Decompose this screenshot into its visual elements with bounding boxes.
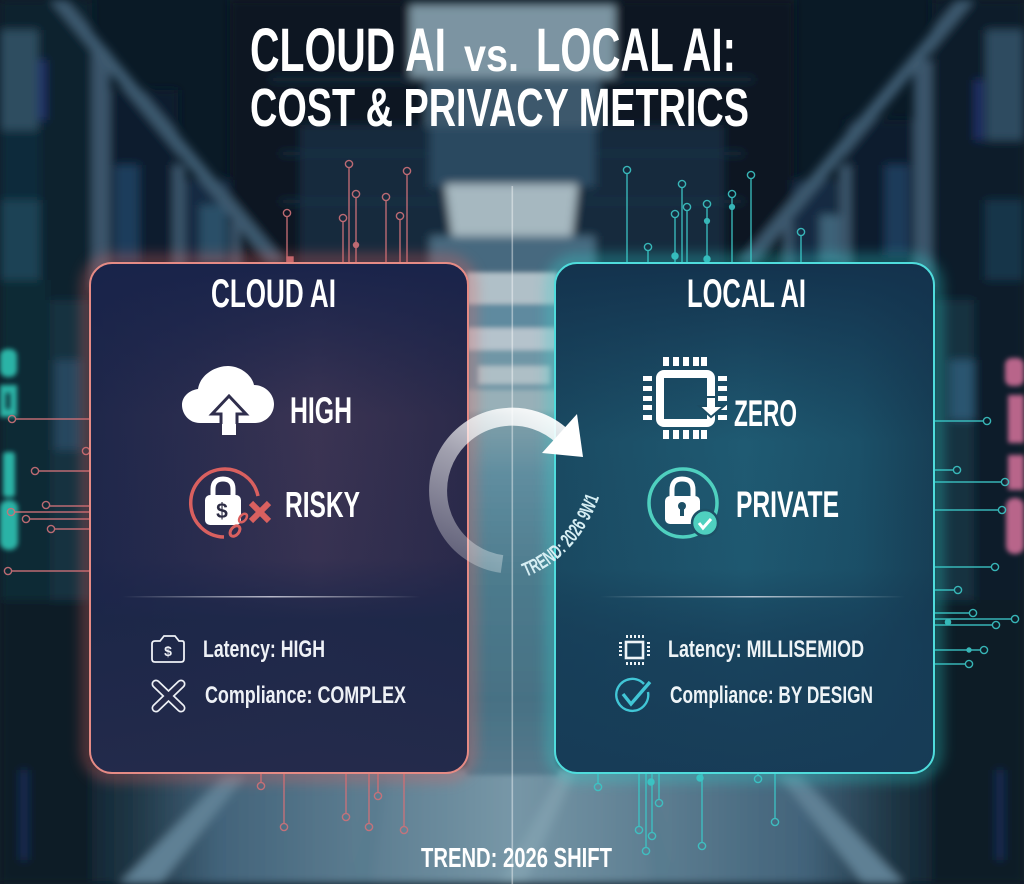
title: vs. <box>464 29 519 81</box>
icon: risky lock: $ <box>216 500 228 523</box>
panel: local AI <box>553 261 936 775</box>
icon: small chip <box>619 635 650 665</box>
icon: dollar case <box>152 636 184 662</box>
row: latency millisemiod: Latency: MILLISEMIOD <box>668 636 864 663</box>
icon: risky lock <box>191 469 269 538</box>
metric: cost high: HIGH <box>290 390 352 431</box>
icon: cloud upload <box>182 366 274 435</box>
icon: private lock <box>649 469 718 537</box>
right rack side <box>932 0 1024 884</box>
title: LOCAL AI: <box>536 16 736 84</box>
neon glow right <box>1005 358 1024 554</box>
icon: check circle <box>616 679 650 711</box>
lit floor and lower bands <box>80 765 944 884</box>
metric: privacy private: PRIVATE <box>736 484 839 525</box>
row: latency high: Latency: HIGH <box>203 636 325 663</box>
circuit traces: cloud side <box>4 160 411 834</box>
divider <box>122 596 420 598</box>
circuit traces: local side <box>594 166 1019 855</box>
heading: cloud AI: CLOUD AI <box>211 272 336 316</box>
title: CLOUD AI <box>250 16 446 84</box>
row: compliance complex: Compliance: COMPLEX <box>205 682 406 709</box>
title <box>250 16 749 138</box>
neon glow left <box>0 349 18 550</box>
title: COST & PRIVACY METRICS <box>250 78 749 138</box>
row: compliance by design: Compliance: BY DESIGN <box>670 682 873 709</box>
icon: chip with arrow <box>643 357 727 439</box>
icon: dollar case: $ <box>164 643 172 659</box>
icon: crossed tools <box>156 684 181 708</box>
label: curved trend text: TREND: 2026 9W1 <box>520 494 599 576</box>
arrow: trend shift <box>438 414 583 564</box>
metric: cost zero: ZERO <box>734 393 797 434</box>
heading: local AI: LOCAL AI <box>687 272 806 316</box>
central strip between panels <box>466 272 558 775</box>
left rack side <box>0 0 92 884</box>
center divider line <box>512 186 513 884</box>
divider <box>600 596 905 598</box>
panel: cloud AI <box>88 261 470 775</box>
footer: trend label: TREND: 2026 SHIFT <box>421 842 612 873</box>
metric: privacy risky: RISKY <box>285 484 360 525</box>
